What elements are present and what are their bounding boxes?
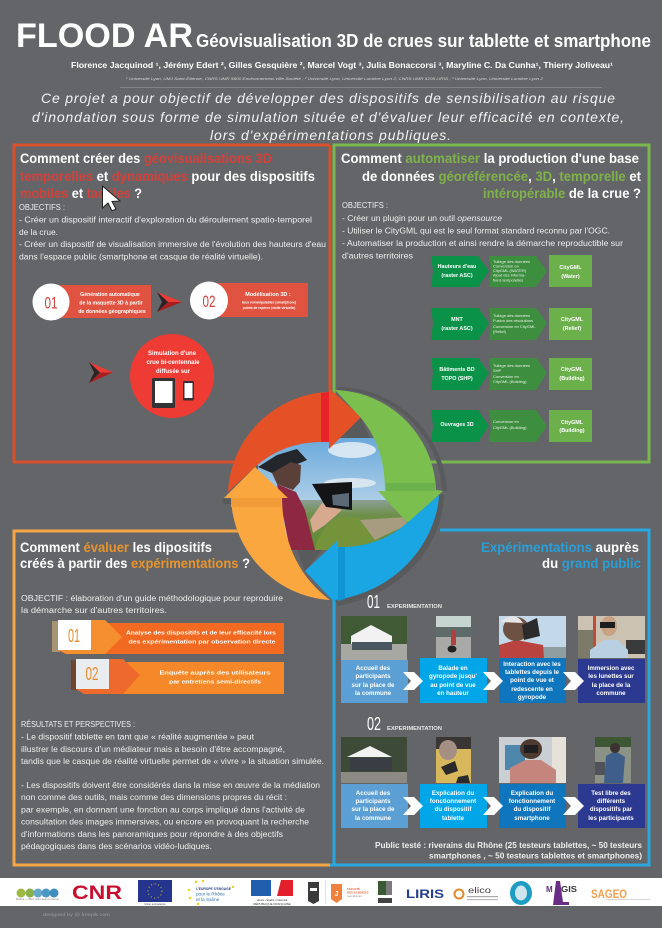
step box 2: en hauteur xyxy=(437,690,469,697)
arrow: orange xyxy=(224,467,330,600)
flow row: buildings: Tuilage des données xyxy=(493,363,530,368)
objective orange: la démarche sur d'autres territoires. xyxy=(21,606,167,615)
flow row: water: Tuilage des données xyxy=(493,259,530,264)
logo: crest xyxy=(308,882,319,904)
flow row: structures: CityGML (Building) xyxy=(493,425,527,430)
logo: Rhone: Rhône — Bien vivre avec le fleuve xyxy=(16,897,59,901)
results text: pédagogiques dans des scénarios vidéo-ludiques. xyxy=(21,842,212,851)
photo: VR user xyxy=(578,616,645,658)
center photo xyxy=(258,438,408,550)
header xyxy=(16,17,651,143)
step box 6: tablette xyxy=(442,815,465,822)
step 02 red: points de repères (visite virtuelle) xyxy=(243,306,295,310)
logo: SAGEO: SAGEO xyxy=(591,887,627,901)
experiment 01 label: 01 xyxy=(367,592,380,612)
flow row: water xyxy=(431,255,592,287)
step 02 red: Modélisation 3D : xyxy=(245,292,291,298)
heading green xyxy=(341,151,641,201)
heading red: Comment créer des géovisualisations 3D xyxy=(20,151,272,166)
heading blue xyxy=(481,540,641,571)
tested public note xyxy=(375,841,643,860)
chevrons row 1 xyxy=(403,672,584,690)
step box 7 xyxy=(499,784,566,828)
panel: red, create xyxy=(14,145,330,462)
step box 2: gyropode jusqu' xyxy=(429,673,477,680)
footer logos xyxy=(0,878,662,906)
objectives red: OBJECTIFS : xyxy=(19,203,65,212)
objectives red: de la crue. xyxy=(19,228,58,237)
step box 2: Balade en xyxy=(438,665,468,672)
objectives red: dans l'espace public (smartphone et casque de réalité virtuelle). xyxy=(19,252,263,262)
logo: Republique Francaise xyxy=(251,880,293,906)
flow row: buildings: CityGML xyxy=(561,367,584,373)
logo: Republique Francaise: Liberté • Égalité • Fraternité xyxy=(257,899,288,902)
step 01 red xyxy=(32,284,151,320)
experiment 02 label: EXPERIMENTATION xyxy=(387,726,442,732)
heading red xyxy=(20,151,315,201)
arrow: green xyxy=(335,390,443,523)
step 01 orange xyxy=(52,620,284,654)
step box 6: Explication du xyxy=(432,790,474,797)
arrow chevron xyxy=(157,292,182,312)
tested public note: Public testé : riverains du Rhône (25 testeurs tablettes, ~ 50 testeurs xyxy=(375,841,643,850)
step box 5: la commune xyxy=(355,815,392,822)
logo: MAGIS: M xyxy=(546,885,553,894)
process row 1 xyxy=(341,658,645,703)
flow row: structures: Ouvrages 3D xyxy=(440,422,474,428)
experiment 02 label xyxy=(367,714,442,734)
flow row: relief: Fusion des résolutions xyxy=(493,318,533,323)
objectives green: - Automatiser la production et ainsi rendre la démarche reproductible sur xyxy=(342,239,623,248)
objectives green: - Créer un plugin pour un outil opensource xyxy=(342,214,503,223)
central cycle diagram xyxy=(222,387,447,606)
step box 3: tablettes depuis le xyxy=(505,669,560,676)
step 01 red: de données géographiques xyxy=(78,309,146,315)
logo: Europe Rhone Saone: pour le Rhône xyxy=(196,892,225,896)
results text: par exemple, en donnant une fonction au corps impliqué dans l'activité de xyxy=(21,806,305,814)
heading green: de données géoréférencée, 3D, temporelle et xyxy=(362,169,641,184)
step 01 red: Génération automatique xyxy=(80,292,140,298)
step 02 orange: par entretiens semi-directifs xyxy=(169,680,261,686)
logo: UJM: DES SCIENCES xyxy=(347,890,369,894)
arrow chevron 2 xyxy=(89,362,113,383)
step box 6: fonctionnement xyxy=(430,798,476,805)
logo: UJM: FACULTÉ xyxy=(347,886,360,891)
logo: MAGIS: GIS xyxy=(561,885,578,894)
logo: EU flag: Union européenne xyxy=(144,902,166,906)
step box 8: dispositifs par xyxy=(590,806,633,813)
intro text: Ce projet a pour objectif de développer des dispositifs de sensibilisation au risque xyxy=(41,90,615,106)
photo: table xyxy=(436,737,471,783)
flow row: water: CityGML (WATER) xyxy=(493,268,527,273)
objective orange: OBJECTIF : élaboration d'un guide méthodologique pour reproduire xyxy=(21,594,283,603)
results text: - Les dispositifs doivent être considérés dans la mise en œuvre de la médiation xyxy=(21,781,320,790)
icon: tablet xyxy=(152,378,175,408)
objectives green: - Utiliser le CityGML qui est le seul format standard reconnu par l'OGC. xyxy=(342,226,610,236)
heading green: intéropérable de la crue ? xyxy=(483,186,641,201)
step box 8: les participants xyxy=(588,815,634,822)
experiment 02 label: 02 xyxy=(367,714,381,734)
intro text: d'inondation sous forme de simulation située et d'évaluer leur efficacité en contexte, xyxy=(32,109,624,125)
step box 4 xyxy=(578,659,645,703)
logo: UJM xyxy=(325,880,369,904)
intro text: lors d'expérimentations publiques. xyxy=(210,127,451,143)
results text: illustrer le discours d'un médiateur mais a besoin d'être accompagné, xyxy=(21,745,285,754)
step box 6 xyxy=(420,784,487,828)
step box 2: au point de vue xyxy=(430,682,476,689)
logo: MAGIS xyxy=(546,881,578,905)
step 02 red: lieux remanipulables (smartphone) xyxy=(242,300,296,304)
photo: smartphone user xyxy=(499,737,566,783)
flow row: structures: CityGML xyxy=(561,420,584,426)
logo: small institute xyxy=(378,881,392,903)
flow row: relief: MNT xyxy=(451,317,464,323)
photo: free test xyxy=(595,737,631,783)
shadows xyxy=(222,387,447,606)
results text: RÉSULTATS ET PERSPECTIVES : xyxy=(21,720,135,729)
photos row 1 xyxy=(341,616,645,660)
logo: EU flag xyxy=(138,880,172,906)
logo: UJM: J xyxy=(335,891,339,898)
step box 2 xyxy=(420,658,487,703)
step 02 red xyxy=(190,282,308,320)
step 01 red: de la maquette 3D à partir xyxy=(79,300,143,306)
tested public note: smartphones , ~ 50 testeurs tablettes et smartphones) xyxy=(429,852,642,860)
flow row: buildings: Bâtiments BD xyxy=(439,367,475,373)
flow row: relief: Tuilage des données xyxy=(493,313,530,318)
logo: elico: elico xyxy=(468,886,492,895)
step 02 orange: 02 xyxy=(86,664,98,684)
photos row 2 xyxy=(341,737,631,783)
logo: LIRIS: LIRIS xyxy=(406,889,444,901)
logo: CNR: CNR xyxy=(72,883,122,904)
objectives red: - Créer un dispositif de visualisation immersive de l'évolution des hauteurs d'eau xyxy=(19,240,326,249)
title: FLOOD AR xyxy=(16,17,193,55)
step box 8 xyxy=(578,784,645,828)
step box 7: fonctionnement xyxy=(509,798,555,805)
logo: Rhone xyxy=(16,888,59,901)
results text: d'informations dans les panoramiques pour répondre à des objectifs xyxy=(21,830,283,839)
step box 7: smartphone xyxy=(514,815,550,822)
objectives green: OBJECTIFS : xyxy=(342,201,388,210)
intro text xyxy=(32,90,624,143)
logo: UJM: Jean Monnet xyxy=(347,895,362,898)
step 02 red: 02 xyxy=(202,292,216,311)
step box 6: du dispositif xyxy=(435,806,472,813)
step box 3: gyropode xyxy=(518,694,547,701)
results text xyxy=(21,720,324,851)
step box 5: Accueil des xyxy=(356,790,391,797)
flow row: water: (raster ASC) xyxy=(441,273,473,279)
logo: Europe Rhone Saone xyxy=(188,880,234,905)
objective orange xyxy=(21,594,283,615)
flow row: water: tions temporelles xyxy=(493,278,523,282)
step 02 orange xyxy=(71,659,284,694)
flow row: buildings: SHP xyxy=(493,368,502,373)
objectives green: d'autres territoires xyxy=(342,252,413,260)
panel: green, automate xyxy=(334,145,649,462)
flow row: relief: CityGML xyxy=(561,317,584,323)
step 01 red: 01 xyxy=(44,294,58,312)
flow row: buildings: (Building) xyxy=(559,376,585,382)
logo: elico xyxy=(454,886,498,900)
objectives green xyxy=(342,201,623,260)
arrow: blue xyxy=(305,495,439,603)
flow row: water: Hauteurs d'eau xyxy=(438,264,476,270)
step box 3: Interaction avec les xyxy=(503,661,561,668)
step 01 orange: des expérimentation par observation directe xyxy=(128,640,276,646)
logo: Europe Rhone Saone: et la Saône xyxy=(196,897,220,902)
flow row: buildings xyxy=(431,358,592,390)
objectives red: - Créer un dispositif interactif d'exploration du déroulement spatio-temporel xyxy=(19,216,312,224)
step box 4: Immersion avec xyxy=(588,665,635,672)
flow row: relief: (raster ASC) xyxy=(441,326,473,332)
simulation circle xyxy=(130,334,214,418)
logo: Europe Rhone Saone: L'EUROPE S'ENGAGE xyxy=(196,887,232,891)
flow row: relief: (Relief) xyxy=(563,326,581,332)
photo: tablet users xyxy=(499,616,566,658)
experiment 01 label: EXPERIMENTATION xyxy=(387,604,442,610)
step box 5 xyxy=(341,784,408,828)
step 01 orange: Analyse des dispositifs et de leur efficacité lors xyxy=(126,630,276,636)
simulation circle: crue bi-centennale xyxy=(146,360,200,366)
photo: tent 2 xyxy=(341,737,407,783)
logo: blue medallion xyxy=(510,881,532,905)
flow row: structures: (Building) xyxy=(559,428,585,434)
simulation circle: diffusée sur xyxy=(156,369,191,375)
affiliations: ¹ Université Lyon, UMJ Saint-Étienne, CNRS UMR 5600 Environnement-Ville-Société ; ² Université Lyon, Université Lumière Lyon 2, CNRS UMR 5205 LIRIS ; ³ Université Lyon, Université Lumière Lyon 2 xyxy=(126,76,543,81)
step box 1: participants xyxy=(355,673,391,680)
panel: blue, experiments xyxy=(330,530,649,865)
heading green: Comment automatiser la production d'une base xyxy=(341,151,639,166)
step box 1: Accueil des xyxy=(356,665,391,672)
authors: Florence Jacquinod ¹, Jérémy Edert ², Gilles Gesquière ², Marcel Vogt ³, Julia Bonaccorsi ³, Maryline C. Da Cunha¹, Thierry Joliveau¹ xyxy=(71,60,613,70)
flow row: water: (Water) xyxy=(561,274,580,280)
icon: phone xyxy=(183,381,194,400)
step box 3 xyxy=(499,658,566,703)
step box 1: sur la place de xyxy=(352,682,395,689)
step 02 orange: Enquête auprès des utilisateurs xyxy=(160,670,270,676)
heading orange: créés à partir des expérimentations ? xyxy=(20,556,250,571)
logo: Republique Francaise: RÉPUBLIQUE FRANÇAISE xyxy=(253,901,291,906)
results text: - Le dispositif tablette en tant que « réalité augmentée » peut xyxy=(21,732,255,742)
step box 8: différents xyxy=(597,798,626,805)
results text: tandis que le casque de réalité virtuelle permet de « vivre » la situation simulée. xyxy=(21,757,324,766)
objectives red xyxy=(19,203,326,262)
step box 3: redescente en xyxy=(511,686,553,693)
step 01 orange: 01 xyxy=(68,626,80,646)
step box 4: les lunettes sur xyxy=(588,673,634,680)
flow row: relief: (Relief) xyxy=(493,329,507,334)
flow row: buildings: Conversion en xyxy=(493,374,519,379)
heading orange xyxy=(20,540,250,571)
results text: non comme des outils, mais comme des dimensions propres du récit : xyxy=(21,793,287,802)
step box 7: Explication du xyxy=(511,790,553,797)
experiment 01 label xyxy=(367,592,442,612)
heading blue: du grand public xyxy=(542,556,641,571)
chevrons row 2 xyxy=(403,797,584,815)
step box 8: Test libre des xyxy=(591,790,631,797)
flow row: buildings: CityGML (Building) xyxy=(493,379,527,384)
step box 4: commune xyxy=(596,690,626,697)
step box 4: la place de la xyxy=(592,682,631,689)
flow row: relief xyxy=(431,308,592,340)
heading red: temporelles et dynamiques pour des dispositifs xyxy=(20,169,315,184)
photo: segway xyxy=(436,616,471,659)
flow row: buildings: TOPO (SHP) xyxy=(441,376,473,382)
flow row: water: Conversion en xyxy=(493,264,519,268)
step box 1 xyxy=(341,660,408,703)
icon: mouse cursor xyxy=(102,186,120,211)
arrow: red xyxy=(228,388,361,492)
step box 7: du dispositif xyxy=(514,806,551,813)
step box 1: la commune xyxy=(355,690,392,697)
flow row: water: Ajout des informa- xyxy=(493,272,526,278)
flow row: water: CityGML xyxy=(559,265,582,271)
results text: consultation des images immersives, ou encore en provoquant la recherche xyxy=(21,818,309,826)
process row 2 xyxy=(341,784,645,828)
flow row: structures xyxy=(431,410,592,442)
step box 5: participants xyxy=(355,798,391,805)
step box 5: sur la place de xyxy=(352,806,395,813)
simulation circle: Simulation d'une xyxy=(148,351,197,357)
step box 3: point de vue et xyxy=(510,677,554,684)
heading orange: Comment évaluer les dipositifs xyxy=(20,540,212,555)
panel: orange, evaluate xyxy=(14,531,330,865)
heading red: mobiles et tactiles ? xyxy=(20,186,142,201)
flow row: structures: Conversion en xyxy=(493,419,519,424)
credit: designed by @ freepik.com xyxy=(43,912,110,917)
heading blue: Expérimentations auprès xyxy=(481,540,639,555)
flow row: relief: Conversion en CityGML xyxy=(493,324,536,329)
photo: tent xyxy=(341,616,407,660)
